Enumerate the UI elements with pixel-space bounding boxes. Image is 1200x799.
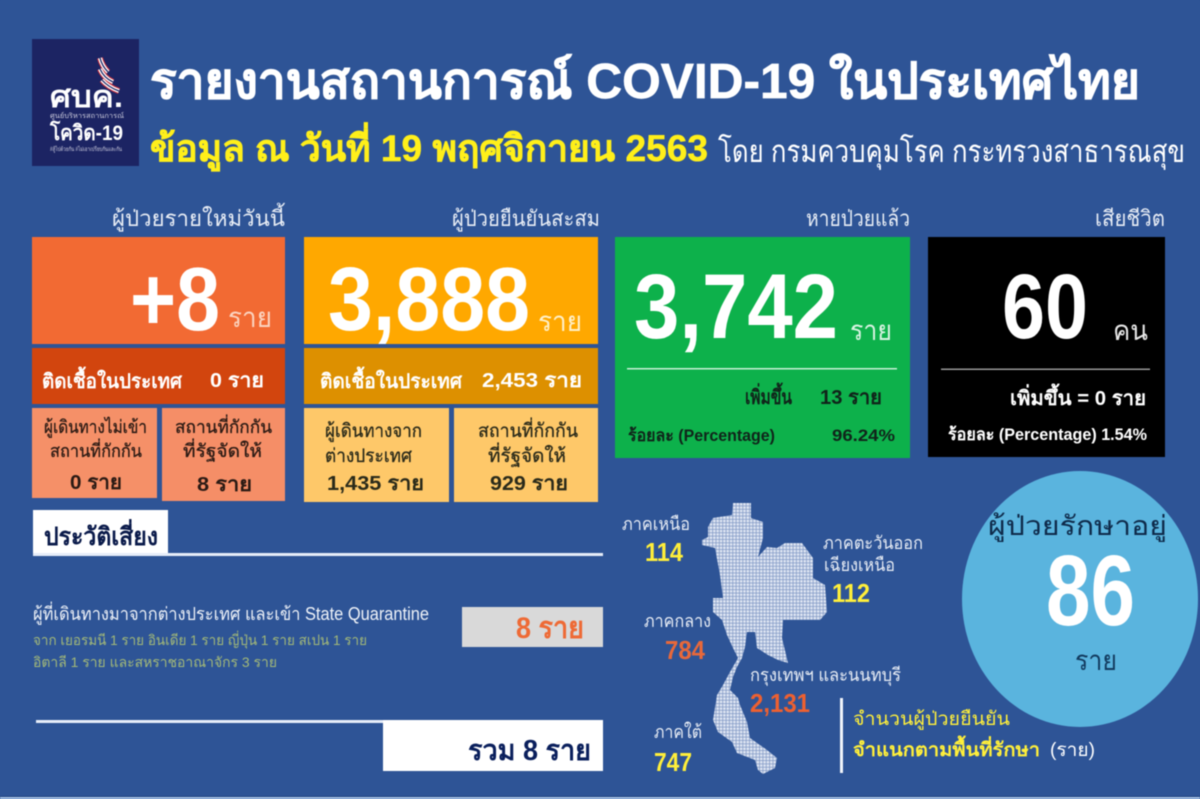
panel: deaths: คน [1113, 315, 1148, 346]
callout: patients in treatment: ผู้ป่วยรักษาอยู่ [988, 511, 1167, 542]
region: Bangkok and Nonthaburi [750, 665, 901, 718]
region: northeast [823, 533, 923, 608]
panel: state quarantine new [162, 408, 285, 501]
panel: travellers from abroad: 1,435 ราย [327, 473, 424, 495]
region: northeast: เฉียงเหนือ [824, 555, 895, 575]
panel: deaths [928, 237, 1165, 457]
panel: state quarantine new: 8 ราย [197, 474, 252, 496]
heading: deaths: เสียชีวิต [1095, 206, 1165, 231]
panel: new cases: +8 [130, 250, 220, 350]
map caption: จำนวนผู้ป่วยยืนยัน [853, 709, 1010, 730]
panel: recovered: 3,742 [634, 256, 838, 358]
region: north: ภาคเหนือ [622, 514, 690, 534]
heading: risk history [33, 510, 603, 556]
text block: state quarantine arrivals: จาก เยอรมนี 1 ราย อินเดีย 1 ราย ญี่ปุ่น 1 ราย สเปน 1 ราย [33, 631, 367, 649]
panel: state quarantine cumulative: สถานที่กักกัน [478, 417, 578, 442]
callout: 8 cases: 8 ราย [516, 612, 584, 645]
region: south [654, 721, 702, 777]
callout: patients in treatment: ราย [1075, 645, 1117, 676]
total [36, 720, 603, 771]
panel: state quarantine cumulative: 929 ราย [490, 473, 568, 495]
region: northeast: ภาคตะวันออก [823, 533, 923, 553]
panel: new cases: ราย [228, 302, 272, 333]
heading: cumulative: ผู้ป่วยยืนยันสะสม [452, 206, 600, 232]
map caption [840, 698, 1095, 773]
panel: cumulative: ราย [538, 306, 582, 337]
heading: recovered: หายป่วยแล้ว [806, 206, 910, 231]
panel: new domestic [32, 348, 285, 404]
panel: cumulative domestic: ติดเชื้อในประเทศ [320, 366, 463, 393]
title: รายงานสถานการณ์ COVID-19 ในประเทศไทย [150, 52, 1140, 109]
map caption: จำแนกตามพื้นที่รักษา [853, 735, 1040, 761]
logo: โควิด-19 [49, 120, 123, 145]
logo: #สู้ไปด้วยกัน #ไม่เอาเปรียบกันและกัน [50, 145, 122, 153]
panel: state quarantine cumulative [454, 408, 598, 502]
region: south: 747 [654, 747, 692, 777]
panel: deaths: ร้อยละ (Percentage) 1.54% [948, 425, 1147, 444]
panel: recovered [615, 237, 910, 458]
panel: recovered: ร้อยละ (Percentage) [628, 426, 775, 445]
logo: ศูนย์บริหารสถานการณ์ [50, 112, 125, 120]
heading: risk history: ประวัติเสี่ยง [44, 519, 158, 551]
panel: cumulative domestic: 2,453 ราย [482, 370, 582, 392]
panel: cumulative domestic [304, 348, 598, 404]
heading: new cases: ผู้ป่วยรายใหม่วันนี้ [112, 203, 285, 232]
callout: 8 cases [462, 607, 603, 647]
panel: recovered: เพิ่มขึ้น [745, 382, 792, 409]
panel: new domestic: 0 ราย [210, 370, 264, 392]
panel: new cases [32, 237, 285, 350]
map caption: (ราย) [1050, 740, 1095, 761]
logo [32, 39, 139, 166]
region: central [644, 611, 711, 665]
logo: ศบค. [50, 81, 123, 114]
callout: patients in treatment: 86 [1046, 535, 1135, 647]
text block: state quarantine arrivals [33, 601, 429, 670]
map of Thailand [702, 503, 827, 774]
region: northeast: 112 [832, 578, 870, 608]
panel: recovered: ราย [850, 315, 892, 346]
region: north [622, 514, 690, 567]
panel: cumulative: 3,888 [328, 250, 530, 350]
panel: travellers from abroad: ผู้เดินทางจาก [325, 421, 422, 442]
panel: deaths: เพิ่มขึ้น = 0 ราย [1010, 383, 1146, 410]
panel: state quarantine cumulative: ที่รัฐจัดให้ [488, 442, 566, 467]
panel: travellers not in quarantine: สถานที่กักกัน [50, 438, 142, 461]
panel: travellers not in quarantine: 0 ราย [70, 472, 122, 494]
subtitle: date: ข้อมูล ณ วันที่ 19 พฤศจิกายน 2563 [150, 122, 708, 172]
text block: state quarantine arrivals: ผู้ที่เดินทางมาจากต่างประเทศ และเข้า State Quarantine [33, 601, 429, 625]
panel: travellers from abroad [304, 408, 449, 502]
panel: new domestic: ติดเชื้อในประเทศ [42, 366, 183, 393]
panel: deaths: 60 [1002, 256, 1088, 358]
region: Bangkok and Nonthaburi: 2,131 [750, 688, 810, 718]
callout: patients in treatment [962, 471, 1198, 727]
panel: recovered: 13 ราย [820, 387, 882, 409]
panel: state quarantine new: ที่รัฐจัดให้ [183, 438, 262, 462]
region: Bangkok and Nonthaburi: กรุงเทพฯ และนนทบุรี [750, 665, 901, 686]
region: north: 114 [645, 537, 683, 567]
panel: cumulative [304, 237, 598, 350]
total: รวม 8 ราย [468, 735, 591, 767]
panel: recovered: 96.24% [832, 426, 895, 445]
region: central: ภาคกลาง [644, 611, 711, 631]
panel: travellers not in quarantine [32, 408, 157, 498]
panel: state quarantine new: สถานที่กักกัน [175, 414, 272, 437]
region: south: ภาคใต้ [654, 721, 702, 742]
region: central: 784 [665, 635, 705, 665]
panel: travellers from abroad: ต่างประเทศ [325, 446, 412, 467]
text block: state quarantine arrivals: อิตาลี 1 ราย และสหราชอาณาจักร 3 ราย [33, 654, 277, 670]
panel: travellers not in quarantine: ผู้เดินทางไม่เข้า [44, 416, 147, 438]
